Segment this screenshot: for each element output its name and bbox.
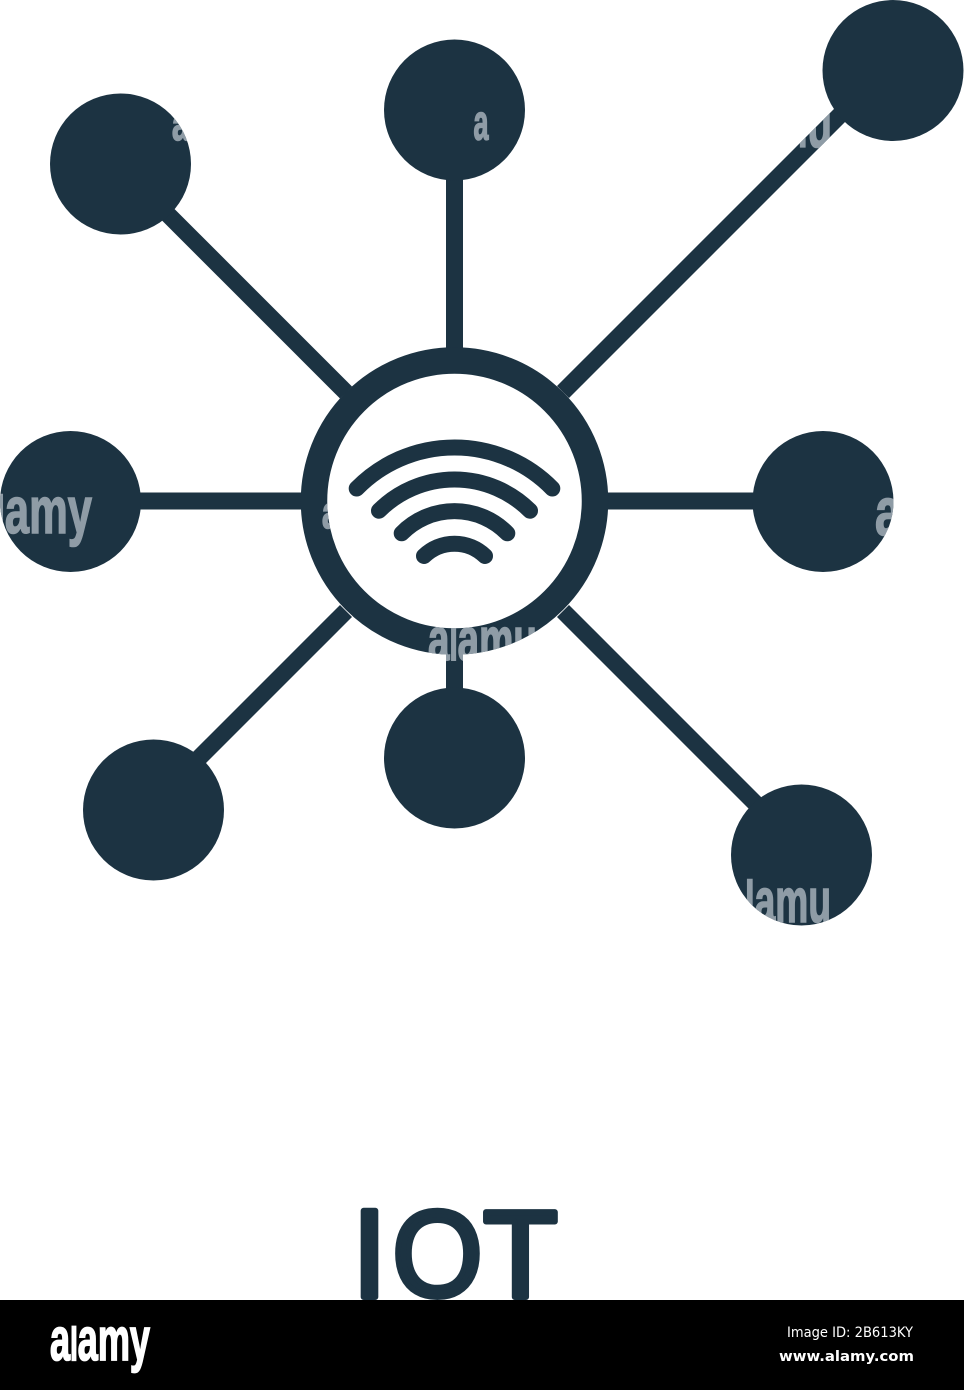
watermarks: lu	[798, 92, 832, 161]
title: IOT: T	[483, 1187, 558, 1324]
central hub ring	[314, 360, 595, 642]
image id: Image ID: 2B613KY	[787, 1325, 913, 1341]
footer bar	[0, 1300, 964, 1390]
watermarks: a	[875, 474, 902, 550]
website: www.alamy.com	[779, 1349, 914, 1365]
icon: IoT network hub	[0, 0, 964, 926]
icon: wifi signal arcs	[357, 447, 552, 556]
title: IOT: I	[352, 1185, 387, 1324]
footer logo: alamy	[50, 1306, 150, 1373]
watermarks: a	[322, 487, 340, 538]
title: IOT	[352, 1185, 558, 1324]
watermarks: lamu	[745, 867, 831, 936]
title: IOT: O	[392, 1186, 482, 1322]
watermarks	[0, 92, 902, 936]
satellite nodes	[0, 0, 964, 926]
watermarks: alamu	[428, 606, 537, 673]
connector lines	[70, 75, 880, 848]
watermarks: a	[172, 99, 190, 150]
watermarks: a	[474, 94, 489, 150]
